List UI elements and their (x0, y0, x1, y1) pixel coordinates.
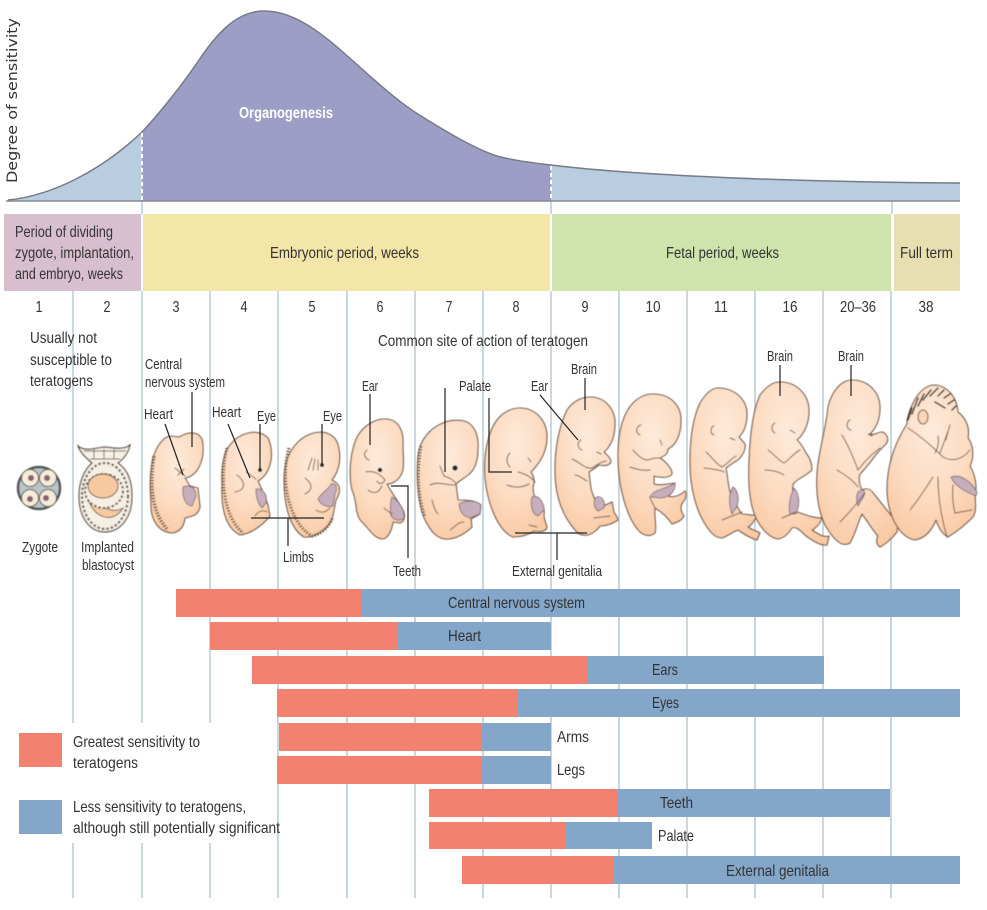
site label: eye week 5 (322, 409, 342, 465)
bar: palate (429, 822, 694, 849)
bar: arms (279, 723, 589, 751)
band: embryonic period: Embryonic period, weeks (270, 245, 419, 262)
icon: zygote (18, 467, 60, 509)
organogenesis boundaries (142, 133, 551, 200)
band: dividing zygote period (4, 214, 141, 291)
embryo: week 7 (417, 420, 481, 539)
bar: legs: Legs (557, 762, 585, 779)
embryo: week 16 (749, 382, 829, 545)
curve area: later development (551, 165, 960, 201)
week grid lines (73, 201, 892, 898)
curve area: organogenesis (142, 11, 551, 201)
site label: ear week 9: Ear (531, 379, 548, 395)
y-axis label: Degree of sensitivity (5, 18, 21, 183)
week numbers: 8 (512, 299, 520, 316)
site label: external genitalia: External genitalia (512, 564, 603, 580)
week numbers: 11 (714, 299, 728, 316)
period bands (4, 214, 960, 291)
week numbers: 10 (646, 299, 661, 316)
bar: legs (277, 756, 585, 784)
fetus: week 38 (887, 385, 977, 540)
label: implanted blastocyst: blastocyst (82, 558, 134, 574)
label: zygote: Zygote (22, 540, 58, 556)
bar: eyes (277, 689, 960, 717)
site label: teeth: Teeth (393, 564, 421, 580)
bar: central nervous system: Central nervous system (448, 595, 585, 612)
bar: teeth (429, 789, 890, 817)
week numbers: 2 (104, 299, 111, 316)
site label: CNS week 3: Central (145, 357, 182, 373)
embryo: week 20-36 (817, 380, 898, 547)
site label: limbs: Limbs (283, 550, 314, 566)
legend (19, 733, 280, 837)
site label: heart week 4: Heart (212, 405, 241, 421)
band: dividing zygote period: zygote, implantation, (15, 245, 134, 262)
bar: ears: Ears (652, 662, 678, 679)
site label: brain week 16: Brain (767, 349, 793, 365)
legend: greatest sensitivity: teratogens (73, 755, 138, 772)
site label: heart week 3: Heart (144, 407, 173, 423)
legend: greatest sensitivity: Greatest sensitivity to (73, 734, 200, 751)
site label: external genitalia (512, 533, 603, 580)
embryo: week 5 (284, 432, 340, 537)
site label: brain week 20-36: Brain (838, 349, 864, 365)
band: dividing zygote period: and embryo, weeks (15, 266, 123, 283)
note: not susceptible: teratogens (30, 373, 93, 390)
label: implanted blastocyst (81, 540, 134, 574)
bar: arms: Arms (557, 729, 589, 746)
bar: eyes: Eyes (652, 695, 679, 712)
legend: less sensitivity: Less sensitivity to teratogens, (73, 799, 246, 816)
embryo: week 3 (150, 433, 203, 533)
note: not susceptible (30, 330, 112, 390)
week numbers: 4 (240, 299, 248, 316)
bar: heart: Heart (448, 628, 481, 645)
curve outline (8, 11, 960, 200)
embryo: week 11 (690, 388, 760, 540)
legend: less sensitivity: although still potentially significant (73, 820, 280, 837)
site label: teeth (391, 486, 421, 580)
legend: greatest sensitivity (19, 733, 200, 772)
site label: brain week 9 (571, 362, 597, 410)
bar: external genitalia: External genitalia (726, 863, 829, 880)
embryo: week 4 (222, 432, 271, 535)
site label: CNS week 3: nervous system (145, 375, 225, 391)
sensitivity bars (0, 589, 960, 884)
week numbers: 16 (782, 299, 798, 316)
band: dividing zygote period: Period of dividing (15, 224, 113, 241)
site label: ear week 6: Ear (362, 379, 378, 395)
site label: eye week 4 (257, 409, 276, 470)
site label: palate (445, 379, 512, 472)
band: full term (894, 214, 960, 291)
curve area: pre-organogenesis (8, 132, 142, 201)
baseline (6, 200, 960, 202)
site label: brain week 9: Brain (571, 362, 597, 378)
bar: central nervous system (176, 589, 960, 617)
week numbers: 5 (308, 299, 316, 316)
bar: heart (210, 622, 551, 650)
band: full term: Full term (900, 245, 953, 262)
week numbers: 1 (36, 299, 43, 316)
leader lines and site labels (22, 349, 864, 580)
label: implanted blastocyst: Implanted (81, 540, 134, 556)
week numbers: 9 (582, 299, 589, 316)
embryo: week 8 (485, 408, 547, 537)
site label: palate: Palate (459, 379, 491, 395)
site label: CNS week 3 (145, 357, 225, 447)
icon: implanted blastocyst (78, 445, 132, 532)
embryo: week 10 (618, 394, 686, 536)
note: not susceptible: Usually not (30, 330, 97, 347)
site label: eye week 5: Eye (323, 409, 342, 425)
site label: brain week 20-36 (838, 349, 864, 396)
site label: heart week 3 (144, 407, 183, 475)
organogenesis label: Organogenesis (239, 105, 333, 122)
week numbers: 7 (446, 299, 453, 316)
site label: ear week 6 (362, 379, 378, 445)
week numbers: 20–36 (840, 299, 876, 316)
bar: teeth: Teeth (660, 795, 693, 812)
embryo: week 9 (555, 397, 618, 535)
bar: ears (252, 656, 824, 684)
embryo: week 6 (350, 419, 404, 539)
week numbers: 38 (918, 299, 934, 316)
bar: external genitalia (462, 856, 960, 884)
heading: common site: Common site of action of teratogen (378, 333, 588, 350)
week numbers (36, 299, 934, 316)
band: fetal period: Fetal period, weeks (666, 245, 779, 262)
legend: less sensitivity (19, 799, 280, 837)
site label: eye week 4: Eye (257, 409, 276, 425)
band: embryonic period (143, 214, 550, 291)
illustrations (18, 380, 977, 547)
site label: heart week 4 (212, 405, 250, 478)
week numbers: 6 (376, 299, 384, 316)
week numbers: 3 (172, 299, 180, 316)
note: not susceptible: susceptible to (30, 352, 112, 369)
bar: palate: Palate (658, 828, 694, 845)
site label: ear week 9 (531, 379, 578, 440)
site label: brain week 16 (767, 349, 793, 396)
sensitivity curve chart (6, 11, 960, 201)
legend backing (0, 723, 277, 843)
band: fetal period (552, 214, 891, 291)
site label: limbs (251, 518, 324, 566)
